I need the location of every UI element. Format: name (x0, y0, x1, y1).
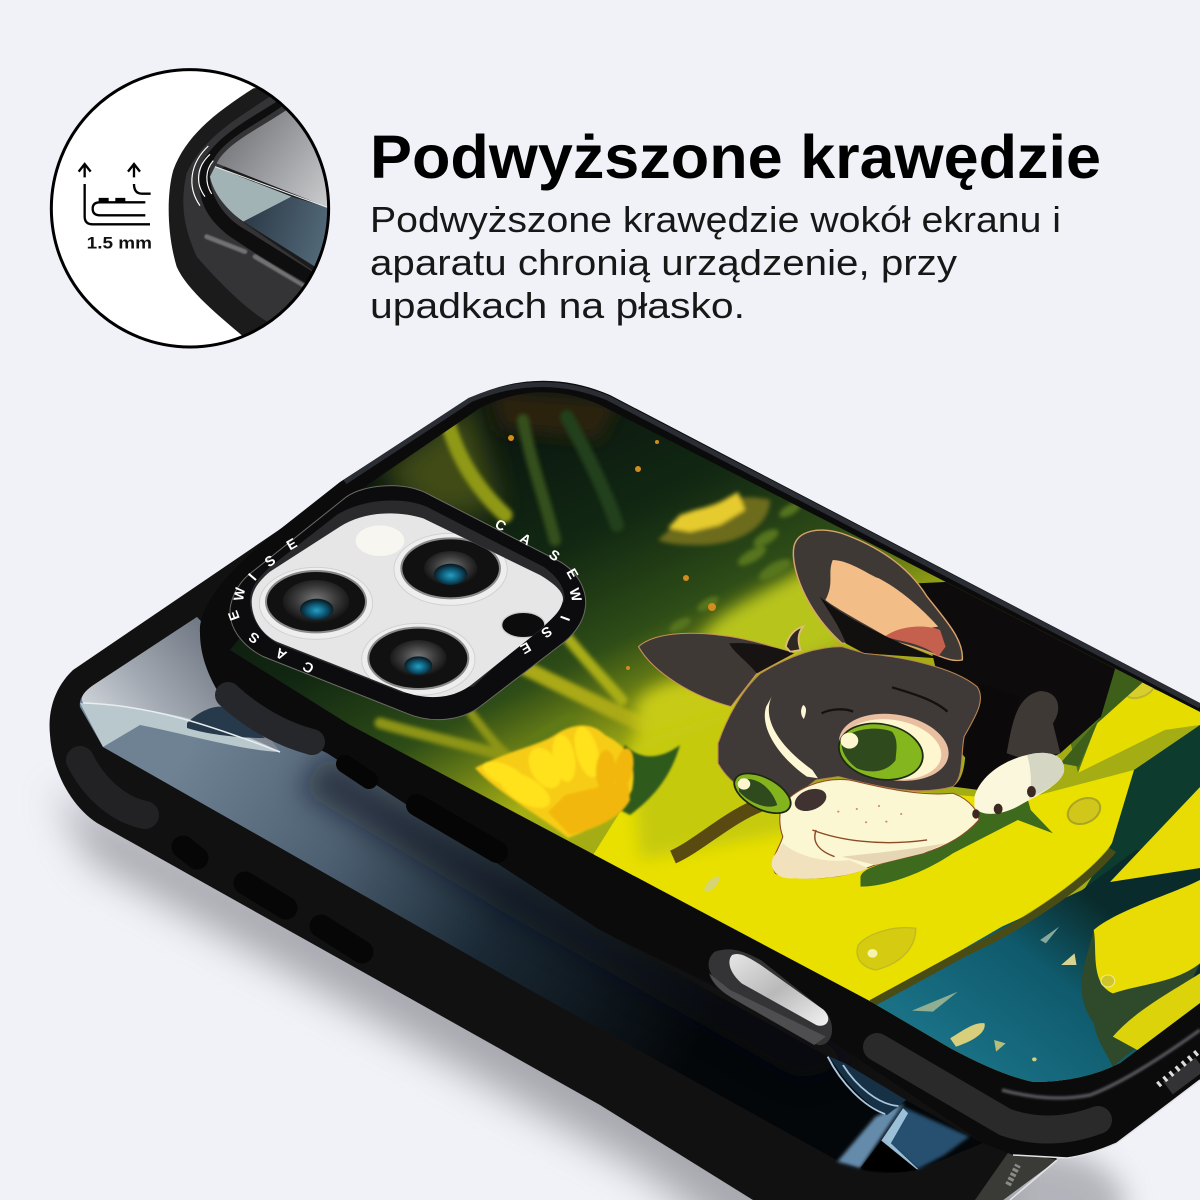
art background (200, 370, 1200, 1090)
upper right leaf (1070, 673, 1200, 773)
brand text on ring: I (245, 570, 260, 583)
camera ring (230, 486, 586, 720)
neck shadow (953, 706, 984, 790)
back phone side strip (975, 1150, 1057, 1200)
nose (791, 785, 830, 815)
rim highlight (207, 237, 303, 285)
head (718, 647, 980, 803)
brand text on ring: A (272, 645, 289, 664)
dark pond gap (1085, 725, 1200, 888)
pond leaf shadow edge (872, 850, 1113, 1003)
mouth line (812, 830, 927, 857)
camera contents (259, 525, 545, 695)
shadow on upper leaf (1060, 667, 1145, 767)
brand text on ring: S (546, 546, 563, 564)
flash (356, 525, 404, 556)
screen pale glass band (80, 703, 280, 752)
side button: back phone volume up (245, 883, 286, 908)
brand text on ring: A (517, 530, 534, 548)
back phone speaker (1008, 1165, 1018, 1185)
bottom speaker (1158, 1050, 1200, 1088)
brand text on ring: W (566, 586, 585, 604)
green leaf behind lily (620, 744, 682, 816)
screen navy blob (187, 707, 265, 738)
detail circle: raised edge close-up (51, 70, 340, 353)
screen gray reflection (82, 617, 280, 752)
far ear (793, 530, 962, 661)
brand text on ring (225, 516, 585, 677)
back phone case outline (50, 485, 1057, 1200)
water petals and reflections (912, 992, 958, 1012)
dog body (918, 582, 1116, 766)
brand text on ring: S (261, 552, 278, 570)
brand text on ring: E (563, 565, 582, 582)
sparkles (508, 435, 716, 670)
pad droplets (702, 679, 1156, 894)
brand text on ring: I (557, 614, 574, 623)
impact arcs (192, 146, 213, 206)
wallpaper dark triangle (860, 1141, 918, 1172)
side button: mute slot (345, 764, 369, 780)
heading: Podwyższone krawędzie (370, 123, 1101, 191)
brand text on ring: C (492, 516, 509, 534)
camera glass window (252, 513, 563, 697)
back phone rim carbon panel (80, 760, 145, 815)
inner ear (825, 560, 938, 637)
brand text on ring: C (300, 658, 317, 677)
thickness label: 1.5 mm (87, 233, 152, 252)
blurred green grass blades (380, 417, 665, 757)
back phone edge line (1010, 1160, 1057, 1200)
screen bright edge (215, 167, 330, 208)
blurred yellow flower (658, 492, 770, 545)
raised edge icon (79, 164, 151, 224)
pad droplet (857, 928, 916, 970)
side button: back phone volume down (321, 926, 362, 952)
olive glow top left (380, 400, 500, 520)
wallpaper light rays (828, 1057, 969, 1172)
brand text on ring: S (538, 623, 555, 642)
forehead creases (822, 687, 947, 713)
description text: upadkach na płasko. (370, 285, 745, 326)
charging port cutout (709, 949, 832, 1045)
brown glow top (490, 390, 620, 440)
dog illustration (638, 530, 1145, 887)
description text: aparatu chronią urządzenie, przy (370, 242, 957, 283)
freckles (837, 805, 902, 823)
icon phone buttons (99, 193, 125, 206)
muzzle (773, 779, 979, 878)
screen glass (210, 167, 292, 222)
description text (370, 199, 1061, 326)
camera bump (225, 486, 586, 720)
front phone rim gloss (1002, 1030, 1200, 1098)
near ear (638, 633, 794, 707)
case corner close-up (169, 80, 340, 353)
circle base (51, 70, 329, 347)
screen white curve (83, 703, 280, 752)
side button: power (417, 805, 497, 852)
olive bank between pads (1082, 880, 1200, 1067)
pond water (857, 850, 1200, 1090)
artwork: dog on lily pad (200, 370, 1200, 1090)
paw claws (972, 786, 1036, 819)
main lily pad (590, 770, 1134, 1003)
phone shadow (55, 790, 1125, 1200)
camera inner bevel (250, 500, 565, 693)
brand text on ring: E (518, 639, 534, 658)
description text: Podwyższone krawędzie wokół ekranu i (370, 199, 1061, 240)
front phone body (200, 381, 1200, 1158)
back phone with case (50, 485, 1057, 1200)
brand text on ring: S (245, 629, 262, 647)
port metal insert (729, 954, 828, 1026)
pad shadow under dog (860, 797, 1053, 887)
brow highlight (765, 697, 818, 778)
green dabs (667, 500, 803, 635)
screen upper (217, 110, 330, 208)
ear pink (885, 627, 946, 657)
brand text on ring: W (230, 585, 248, 602)
brand text on ring: E (283, 535, 300, 553)
lily pad left glow (628, 706, 782, 863)
big eye (832, 705, 956, 790)
side button: back phone mute (183, 847, 197, 858)
ear dark fur (820, 597, 938, 658)
circle border (51, 70, 329, 347)
top right yellow pad (1110, 787, 1200, 882)
foreleg (1007, 691, 1060, 760)
front phone edge white line (1013, 1080, 1200, 1158)
dark shade along front phone (300, 753, 860, 1080)
brand text on ring: E (225, 609, 243, 623)
front phone lower rim carbon panel (877, 1047, 1098, 1130)
paw (974, 753, 1064, 814)
back phone screen (80, 617, 983, 1173)
lens 2 (394, 533, 507, 605)
background light areas (690, 560, 850, 680)
head tuft (786, 627, 803, 652)
yellow water lily (475, 724, 636, 838)
right yellow pad (1094, 880, 1200, 993)
lidar sensor (502, 612, 545, 638)
screen dark (243, 197, 330, 267)
lens 3 (362, 623, 475, 695)
muzzle lower shade (772, 843, 868, 879)
lily stem (673, 803, 765, 857)
front phone case rim lighter band (345, 384, 1200, 706)
lens 1 (259, 567, 373, 639)
front phone left rim carbon panel (228, 695, 312, 742)
small eye (727, 765, 798, 821)
